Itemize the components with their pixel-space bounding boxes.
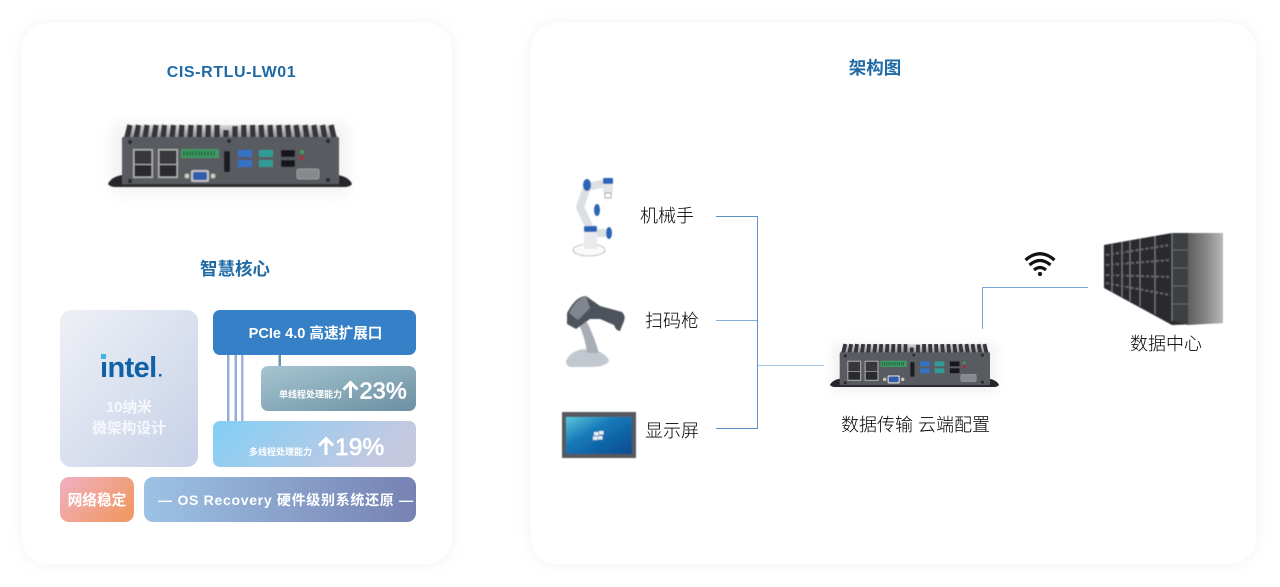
title: model name: CIS-RTLU-LW01 bbox=[167, 64, 296, 81]
label: display screen: 显示屏 bbox=[645, 421, 699, 441]
arrow: up bbox=[344, 382, 358, 398]
card: OS recovery bbox=[144, 477, 416, 522]
panel: product overview bbox=[22, 23, 452, 564]
card: PCIe expansion: PCIe 4.0 高速扩展口 bbox=[249, 324, 382, 342]
icon: barcode scanner bbox=[566, 296, 625, 367]
label: robot arm: 机械手 bbox=[640, 206, 694, 226]
card: multi-thread performance: 19% bbox=[335, 434, 384, 461]
label: barcode scanner: 扫码枪 bbox=[645, 311, 699, 331]
label: data transfer and cloud configuration: 数据传输 云端配置 bbox=[841, 415, 990, 435]
card: network stable: 网络稳定 bbox=[68, 491, 127, 509]
card: single-thread performance: 单线程处理能力 bbox=[279, 388, 342, 400]
card: network stable bbox=[60, 477, 134, 522]
card: multi-thread performance: 多线程处理能力 bbox=[249, 446, 312, 457]
text: 10nm microarchitecture bbox=[92, 398, 166, 437]
connector line: gateway to data center bbox=[982, 288, 1088, 329]
heading: smart core: 智慧核心 bbox=[200, 259, 270, 279]
image: server racks bbox=[1104, 233, 1223, 325]
card: PCIe expansion bbox=[213, 310, 416, 355]
card: single-thread performance: 23% bbox=[360, 378, 407, 404]
text: 10nm microarchitecture: 10纳米 bbox=[106, 398, 152, 416]
connector lines: devices to gateway bbox=[716, 216, 824, 428]
panel: architecture bbox=[531, 23, 1256, 564]
label: data center: 数据中心 bbox=[1130, 334, 1202, 354]
card: single-thread performance bbox=[261, 366, 416, 411]
image: gateway computer bbox=[830, 343, 999, 392]
logo: intel: intel bbox=[100, 352, 157, 384]
icon: display screen bbox=[562, 412, 636, 458]
heading: architecture diagram: 架构图 bbox=[849, 58, 901, 78]
card: intel architecture bbox=[60, 310, 198, 467]
card: multi-thread performance bbox=[213, 421, 416, 467]
icon: robot arm bbox=[573, 178, 613, 256]
text: 10nm microarchitecture: 微架构设计 bbox=[92, 419, 166, 437]
arrow: up bbox=[319, 438, 333, 455]
image: industrial computer bbox=[108, 124, 352, 194]
card: OS recovery: — OS Recovery 硬件级别系统还原 — bbox=[158, 492, 414, 508]
connector lines bbox=[227, 355, 281, 421]
icon: wifi bbox=[1026, 254, 1054, 276]
